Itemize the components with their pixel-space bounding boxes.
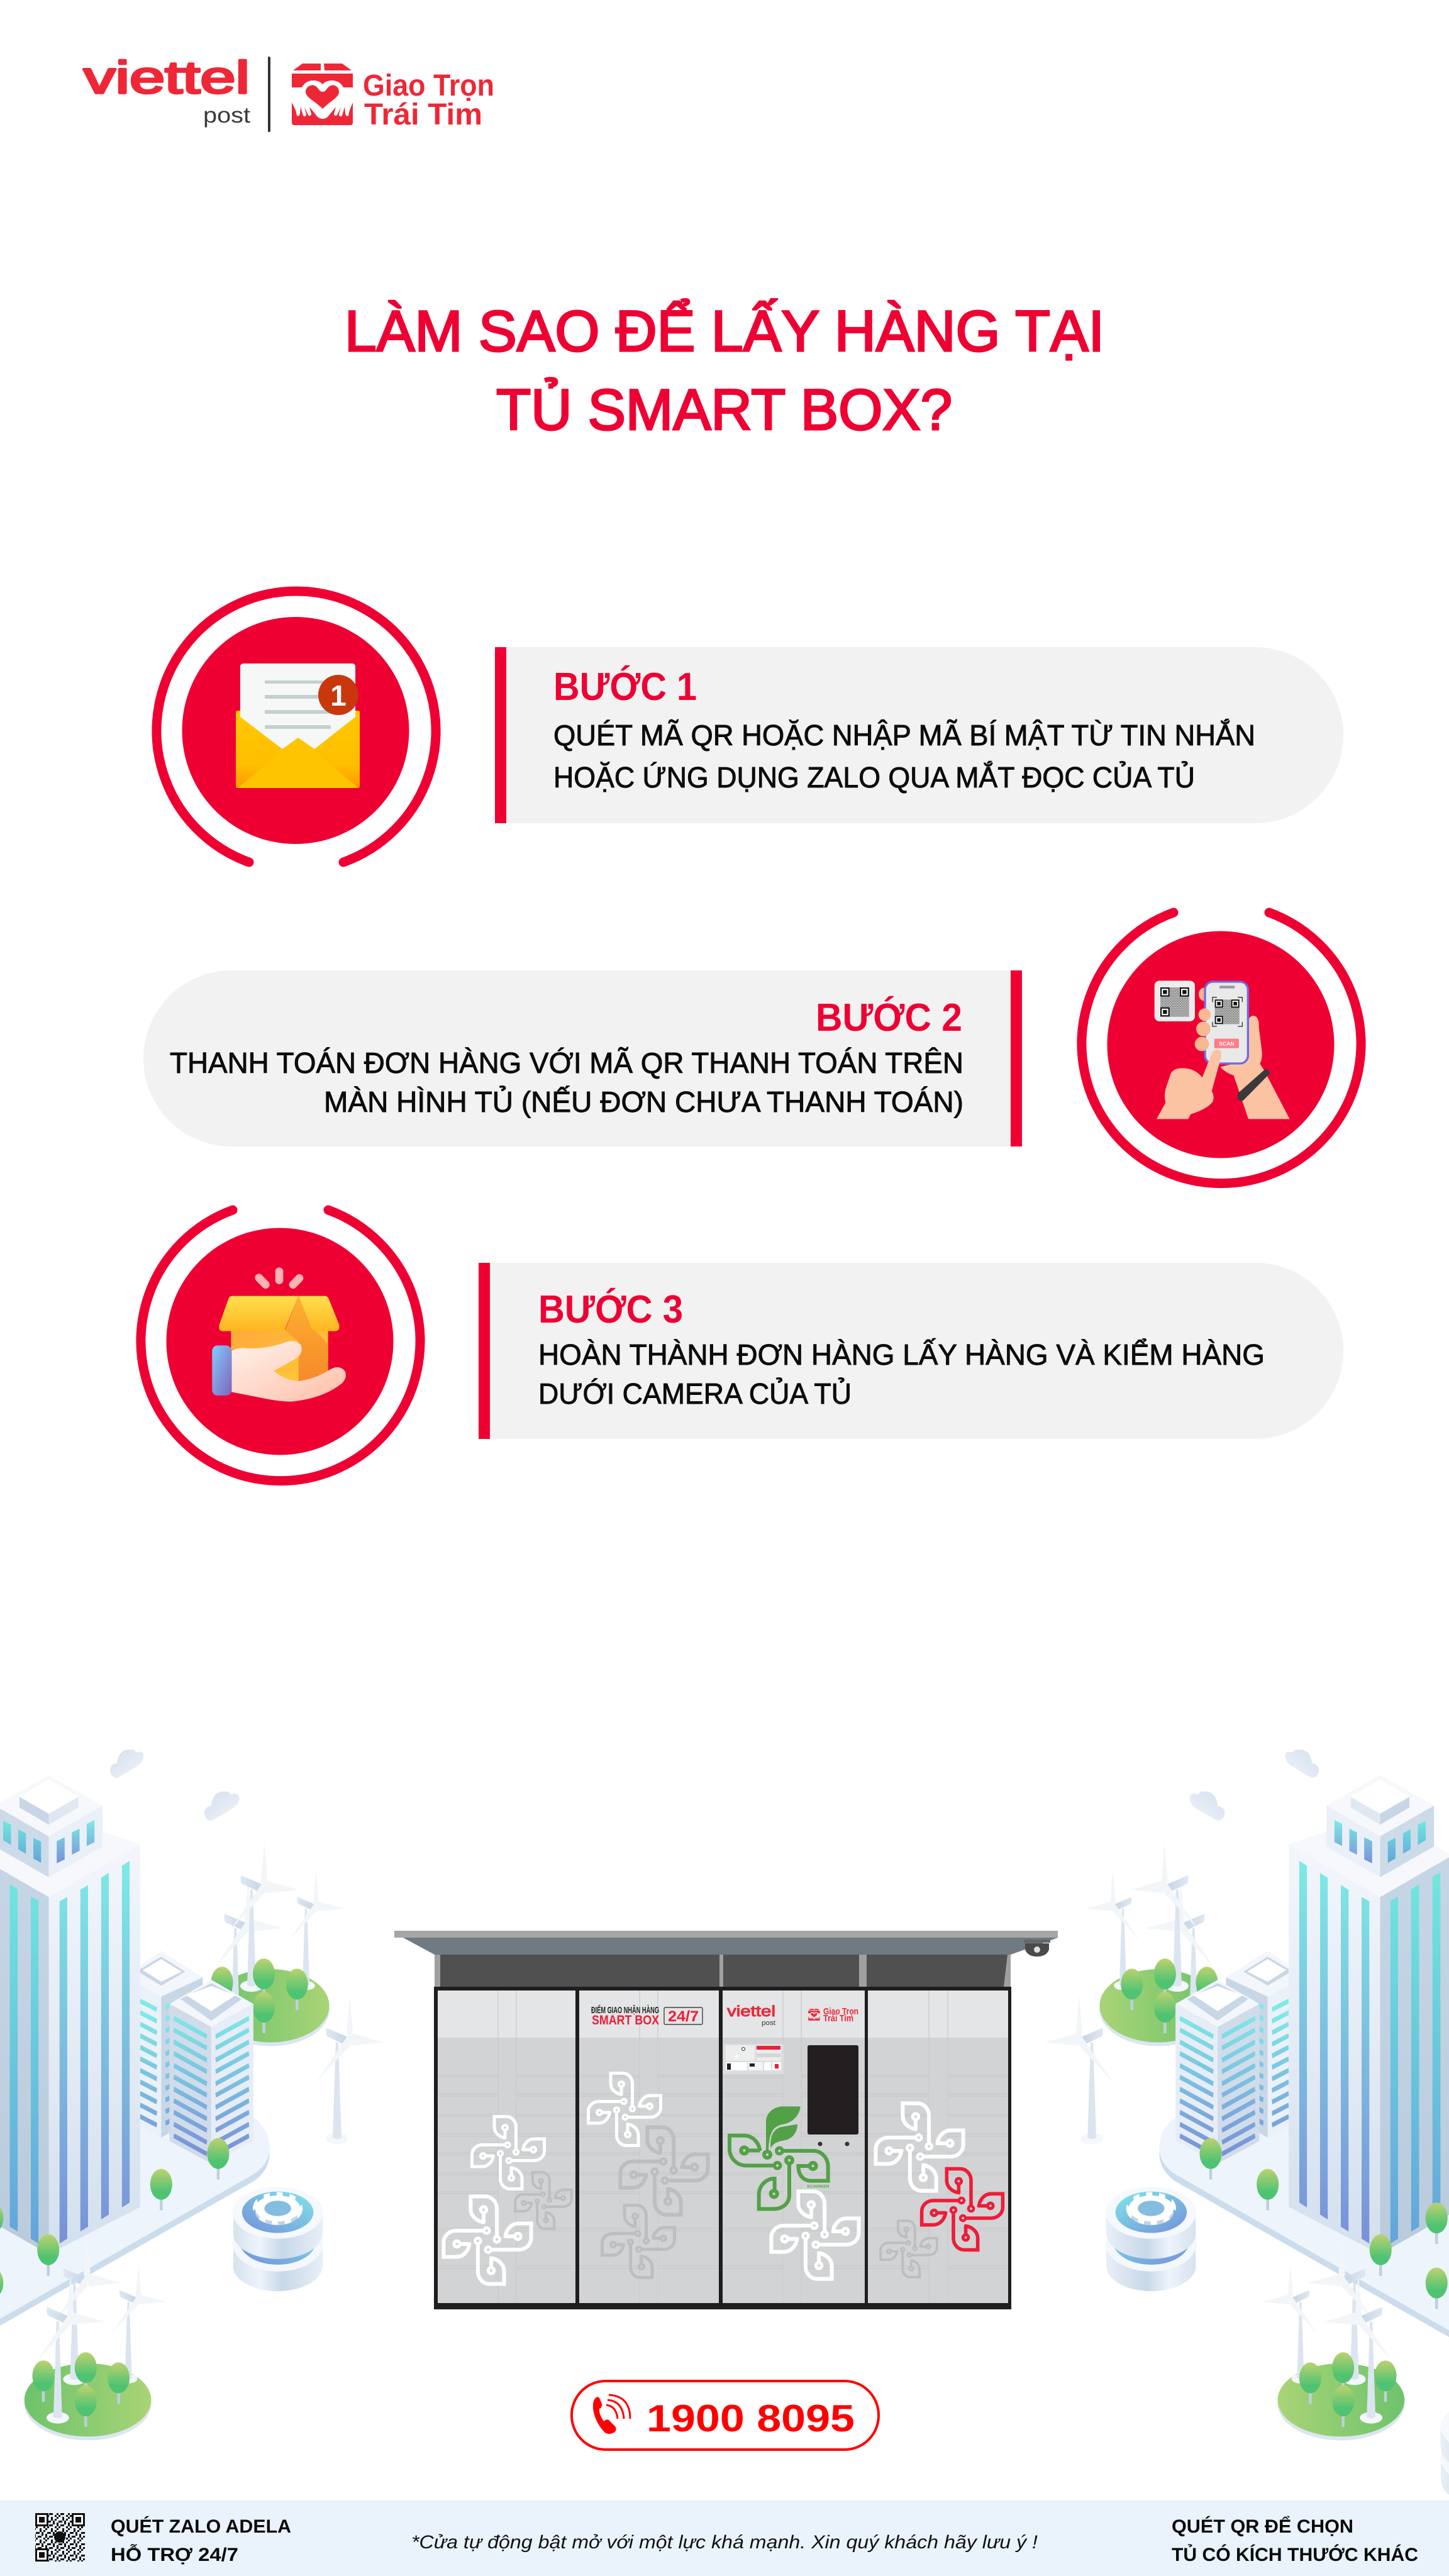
locker canopy xyxy=(403,1938,1058,1955)
ecogreen plant motif xyxy=(730,2106,830,2209)
Giao Tron Trai Tim wordmark: Trái Tim xyxy=(364,98,482,131)
step 3 heading: BƯỚC 3 xyxy=(538,1288,683,1331)
footer left text: HỖ TRỢ 24/7 xyxy=(111,2544,238,2565)
icon: envelope with notification: 1 xyxy=(330,679,347,712)
icon: envelope with notification xyxy=(236,663,360,788)
step 2 disk xyxy=(1107,931,1335,1158)
step 1 text xyxy=(553,719,1255,794)
step 2 text: MÀN HÌNH TỦ (NẾU ĐƠN CHƯA THANH TOÁN) xyxy=(324,1085,963,1118)
logo: Viettel Post and Giao Tron Trai Tim xyxy=(84,53,494,132)
ecogreen plant motif: ECOGREEN xyxy=(808,2185,830,2189)
step 3 accent bar xyxy=(479,1263,490,1439)
locker logos: post xyxy=(762,2019,775,2027)
post wordmark: post xyxy=(203,103,250,128)
step 1 text: HOẶC ỨNG DỤNG ZALO QUA MẮT ĐỌC CỦA TỦ xyxy=(553,761,1195,794)
illustration: left city xyxy=(0,1750,384,2440)
hotline outline xyxy=(572,2381,879,2450)
step 2 text xyxy=(170,1046,963,1118)
locker label: smart box 24/7: SMART BOX xyxy=(592,2013,659,2028)
Giao Tron Trai Tim wordmark: Giao Trọn xyxy=(363,69,494,103)
locker logos xyxy=(727,2003,858,2027)
title: LÀM SAO ĐỂ LẤY HÀNG TẠI xyxy=(345,298,1104,364)
step 3 panel xyxy=(490,1263,1343,1439)
step 3 disk xyxy=(166,1228,394,1455)
illustration: smart box locker xyxy=(394,1931,1058,2309)
icon: hand holding open parcel xyxy=(212,1272,346,1402)
locker frame xyxy=(434,1987,1011,2309)
step 2 ring xyxy=(1082,913,1361,1184)
footer left text xyxy=(111,2516,291,2565)
step 3 text xyxy=(538,1338,1265,1410)
locker label: smart box 24/7 xyxy=(591,2004,702,2028)
step 2 accent bar xyxy=(1011,970,1022,1146)
footer safety note: *Cửa tự động bật mở với một lực khá mạnh. Xin quý khách hãy lưu ý ! xyxy=(411,2532,1038,2553)
icon: Zalo QR code xyxy=(35,2513,85,2562)
locker label: smart box 24/7: 24/7 xyxy=(668,2008,699,2025)
step 1 panel xyxy=(506,647,1343,823)
footer right text xyxy=(1172,2516,1418,2565)
locker logos: Trái Tim xyxy=(823,2013,853,2024)
locker instruction stickers xyxy=(723,2044,784,2074)
footer bar xyxy=(0,2501,1449,2576)
step 2 group xyxy=(143,913,1361,1184)
step 1 disk xyxy=(182,617,409,844)
step 1 group xyxy=(157,591,1343,862)
step 3 text: HOÀN THÀNH ĐƠN HÀNG LẤY HÀNG VÀ KIỂM HÀNG xyxy=(538,1338,1265,1371)
icon: hands scanning QR with phone xyxy=(1155,980,1290,1119)
illustration: right city xyxy=(1045,1750,1449,2440)
step 3 text: DƯỚI CAMERA CỦA TỦ xyxy=(538,1377,852,1410)
title: TỦ SMART BOX? xyxy=(496,377,952,442)
step 1 ring xyxy=(157,591,436,862)
illustration: partial gear at right edge xyxy=(1440,2401,1449,2506)
hotline number: 1900 8095 xyxy=(647,2397,855,2440)
hotline pill xyxy=(572,2381,879,2450)
step 1 heading: BƯỚC 1 xyxy=(553,665,697,709)
footer left text: QUÉT ZALO ADELA xyxy=(111,2516,291,2537)
step 3 group xyxy=(141,1210,1343,1481)
viettel wordmark: viettel xyxy=(84,53,250,103)
locker sensors xyxy=(818,2142,849,2146)
logo divider xyxy=(268,57,270,132)
step 2 heading: BƯỚC 2 xyxy=(816,996,962,1040)
step 2 panel xyxy=(143,970,1011,1146)
locker door panels xyxy=(438,1990,1008,2303)
step 3 ring xyxy=(141,1210,420,1481)
footer right text: TỦ CÓ KÍCH THƯỚC KHÁC xyxy=(1172,2544,1418,2565)
icon: hands scanning QR with phone: SCAN xyxy=(1219,1040,1235,1046)
step 2 text: THANH TOÁN ĐƠN HÀNG VỚI MÃ QR THANH TOÁN TRÊN xyxy=(170,1046,963,1079)
security camera xyxy=(1024,1940,1050,1957)
step 1 accent bar xyxy=(495,647,506,823)
pinwheel circuit motifs xyxy=(443,2073,1002,2284)
locker logos: Giao Trọn xyxy=(823,2006,858,2017)
step 1 text: QUÉT MÃ QR HOẶC NHẬP MÃ BÍ MẬT TỪ TIN NHẮN xyxy=(553,719,1255,752)
title xyxy=(345,298,1104,442)
locker logos: viettel xyxy=(727,2003,775,2020)
footer right text: QUÉT QR ĐỂ CHỌN xyxy=(1172,2516,1353,2537)
locker touch screen xyxy=(808,2045,858,2135)
locker label: smart box 24/7: ĐIỂM GIAO NHẬN HÀNG xyxy=(591,2004,659,2016)
icon: telephone xyxy=(593,2395,630,2434)
icon: brand box with heart xyxy=(292,64,353,125)
Giao Tron Trai Tim wordmark xyxy=(363,69,494,131)
